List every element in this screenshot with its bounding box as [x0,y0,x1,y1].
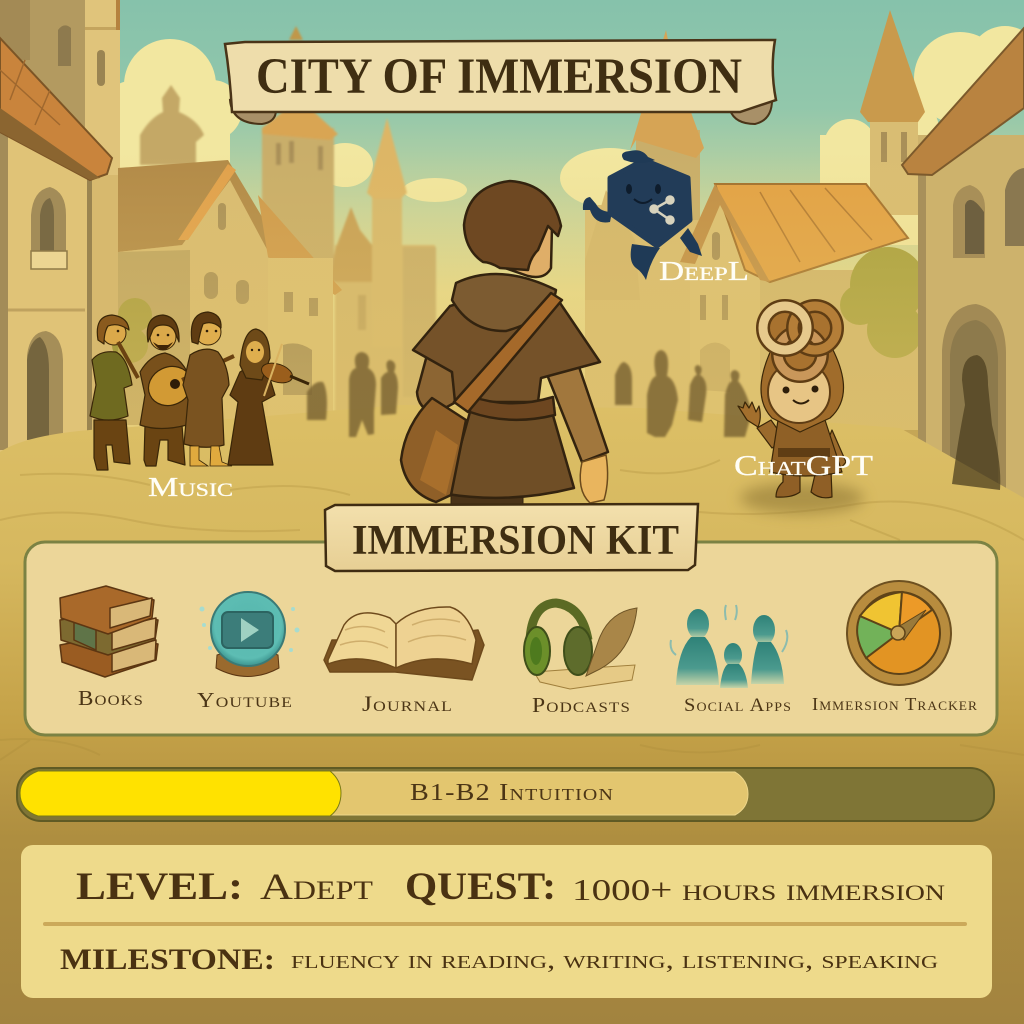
MILESTONE text [60,943,938,976]
banner curls [230,100,772,124]
hero: tunic top [413,296,600,402]
kit banner [325,504,698,571]
building: church and right spire [585,10,930,430]
LEVEL text [76,865,373,908]
DeepL: limbs [583,197,702,280]
ChatGPT: arms [757,420,846,472]
sky background [0,0,1024,430]
silhouette in doorway [952,355,1000,490]
title: CITY OF IMMERSION [256,49,742,105]
icon: books [60,586,158,677]
DeepL: share icon [650,196,674,224]
divider [43,922,967,926]
label: ChatGPT: ChatGPT [734,450,873,482]
hero: right arm [546,358,608,462]
ChatGPT: knot logo [763,303,837,376]
hero: belt [470,396,555,420]
distant buildings left of centre [140,26,436,425]
icon: headphones and quill [524,603,637,689]
LEVEL text: LEVEL: [76,865,243,908]
hero: tunic skirt [447,412,574,498]
label: Social Apps: Social Apps [684,695,792,716]
ChatGPT: face [768,361,830,423]
yellow sector [860,592,902,633]
label: Immersion Tracker: Immersion Tracker [812,694,978,714]
MILESTONE text: fluency in reading, writing, listening, speaking [291,947,938,974]
bar track [17,768,994,821]
musician: flute player [90,315,138,470]
tree [112,247,926,363]
ChatGPT: hood [761,348,844,432]
title banner [225,40,776,124]
LEVEL text: Adept [260,867,373,908]
clouds [100,26,1024,300]
musician: lute player [140,315,234,466]
QUEST text: 1000+ hours immersion [572,872,945,907]
crowd silhouettes [307,350,752,437]
street ground [0,405,1024,1024]
progress bar [17,768,994,821]
kit heading: IMMERSION KIT [352,518,679,564]
bar middle segment [330,772,748,815]
building: left roof [0,38,112,180]
green sector [857,616,899,658]
hero: satchel [401,398,466,502]
quill [586,608,637,676]
needle [893,610,926,640]
hero character [401,181,608,506]
banner body [225,40,776,112]
DeepL mascot [583,150,702,280]
headband [530,603,588,640]
building: left house wall [0,130,120,455]
label: Music: Music [148,472,233,502]
building: left tower [0,0,120,250]
ChatGPT mascot [738,303,846,498]
ChatGPT: waving hand [738,402,760,427]
musician: violinist [228,329,309,465]
DeepL: hair tuft [622,150,655,163]
icon: crystal ball with play button [200,592,300,676]
orange sector [899,592,932,633]
kit panel [25,542,997,735]
building: orange roof [680,184,908,282]
hero: satchel flap [420,430,458,495]
cobble lines [0,460,1024,760]
hero: hair [464,181,561,270]
label: Journal: Journal [362,691,453,716]
label: Youtube: Youtube [197,688,293,712]
icon: immersion tracker gauge [847,581,951,685]
ChatGPT: tunic [770,420,842,476]
building: right house [902,28,1024,505]
QUEST text: QUEST: [405,865,556,908]
MILESTONE text: MILESTONE: [60,943,275,976]
musicians group [90,312,309,470]
hero: hand [580,455,608,503]
musician: singer [183,312,232,466]
label: Books: Books [78,686,144,710]
hero: face [505,220,552,277]
earcups [524,627,550,675]
ChatGPT: belt [778,448,830,457]
icon: social silhouettes [671,605,787,688]
icon: open journal [324,607,484,680]
shadow below ChatGPT [740,482,864,514]
label: Podcasts: Podcasts [532,693,631,717]
label: DeepL: DeepL [659,256,749,286]
DeepL: smile [634,199,652,203]
DeepL: hexagon body [610,160,690,246]
bar label: B1-B2 Intuition [410,780,614,806]
atmospheric haze over town [118,150,918,440]
hero: lower legs [451,490,523,506]
DeepL: eyes [626,184,661,194]
ChatGPT: boots [776,470,832,498]
building: central-left house [118,160,342,425]
bar filled segment [20,771,341,816]
hero: hood [452,274,556,331]
paper [534,665,635,689]
status parchment [21,845,992,998]
hero: left arm [417,355,456,414]
QUEST text [405,865,945,908]
ChatGPT: eyes and smile [782,386,818,404]
hero: strap [454,293,562,412]
